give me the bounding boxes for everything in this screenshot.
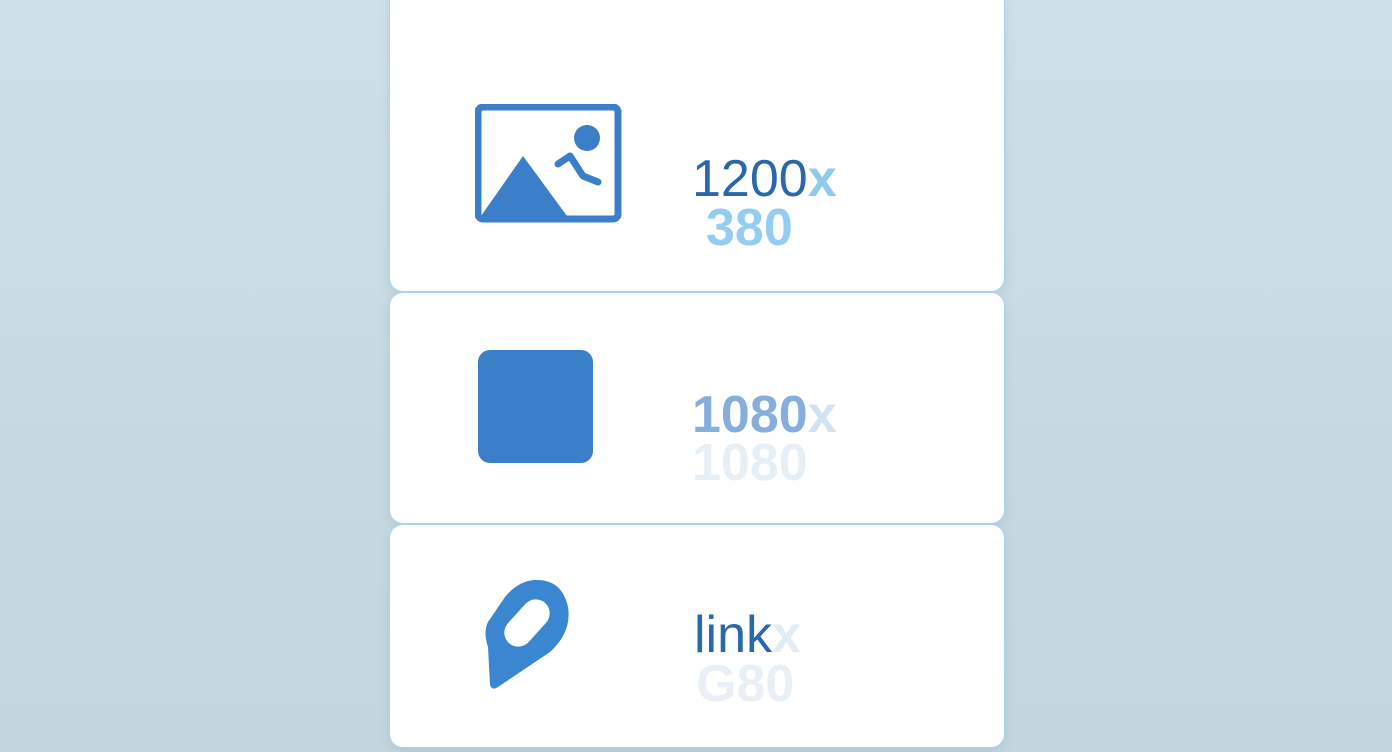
text: 1200x: 1200x	[692, 150, 837, 208]
text: 380: 380	[706, 199, 793, 257]
icon: image	[475, 104, 622, 222]
card: square 1080x1080	[389, 292, 1005, 524]
card: link	[389, 524, 1005, 748]
text: G80: G80	[696, 655, 794, 713]
icon: square	[478, 350, 593, 463]
text: 1080x: 1080x	[692, 386, 837, 444]
text: 1080: 1080	[692, 434, 808, 492]
icon: link tag	[486, 580, 569, 689]
card: image 1200x380	[389, 0, 1005, 292]
text: linkx: linkx	[694, 606, 801, 664]
